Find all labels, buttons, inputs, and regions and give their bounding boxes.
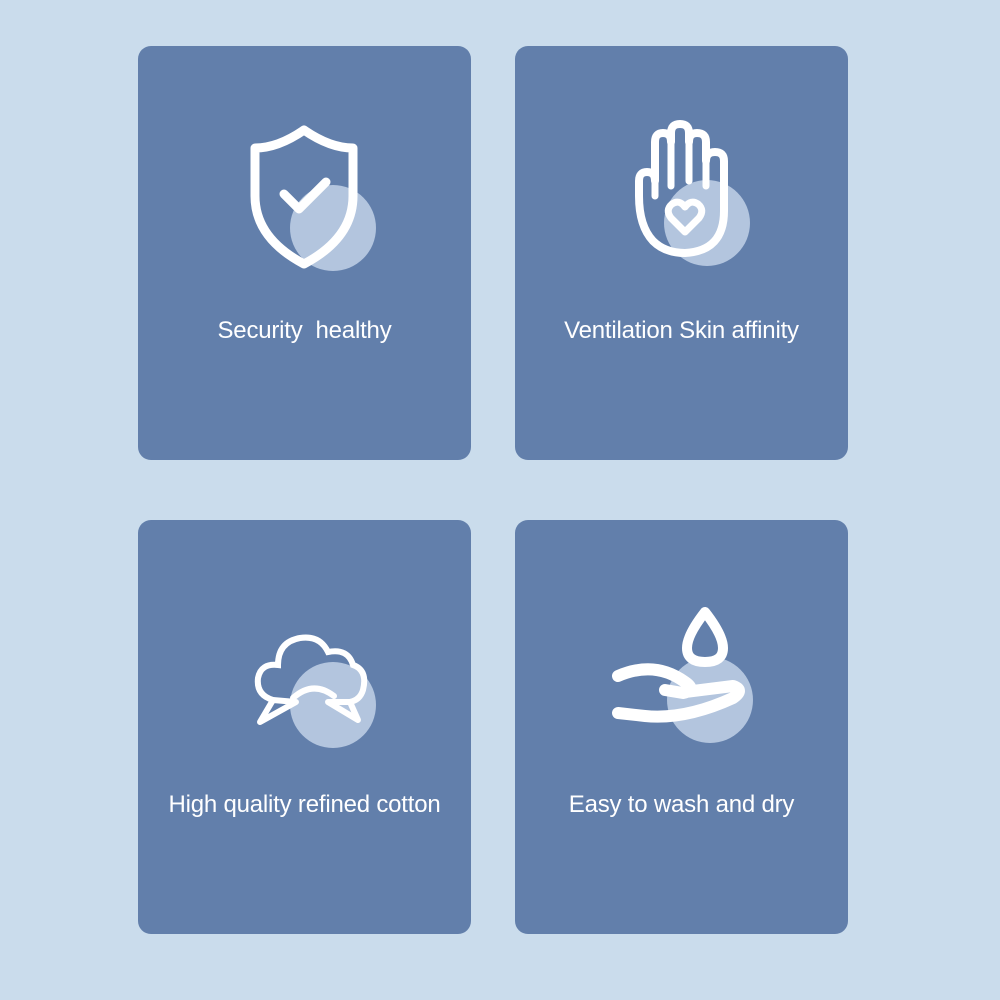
icon: hand with heart	[635, 120, 750, 266]
text: High quality refined cotton	[168, 791, 441, 818]
icon: cotton	[254, 634, 376, 748]
panel: cotton	[138, 520, 471, 934]
icon: shield	[250, 125, 376, 271]
text: Security healthy	[217, 317, 392, 344]
panel: wash	[515, 520, 848, 934]
panel: ventilation	[515, 46, 848, 460]
panel: security	[138, 46, 471, 460]
text: Easy to wash and dry	[569, 791, 794, 818]
icon: hand with drop	[612, 607, 753, 743]
text: Ventilation Skin affinity	[564, 317, 799, 344]
